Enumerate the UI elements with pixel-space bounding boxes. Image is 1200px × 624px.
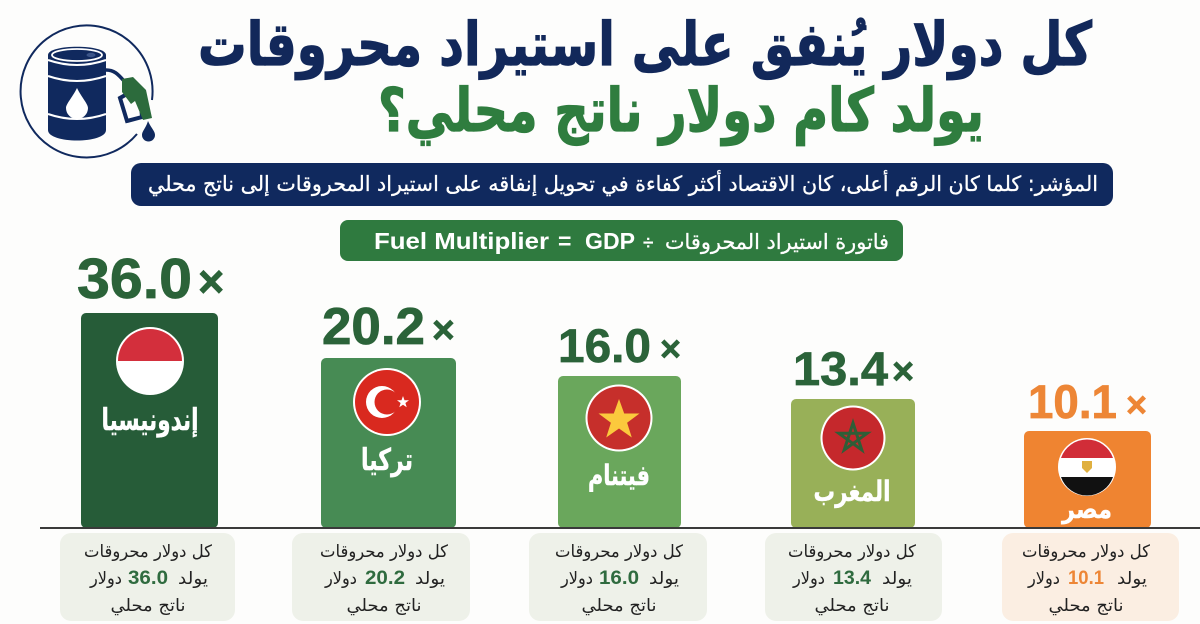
bar: Morocco	[791, 342, 915, 528]
flag: Indonesia	[116, 327, 184, 395]
caption: Vietnam: 16.0	[599, 568, 639, 589]
value: 10.1: 10.1	[1028, 375, 1117, 428]
bar: Turkey	[321, 298, 456, 528]
formula banner: فاتورة استيراد المحروقات	[665, 230, 889, 254]
caption: Turkey	[292, 533, 470, 621]
caption: Morocco: ناتج محلي	[814, 596, 890, 616]
label: Vietnam: فيتنام	[588, 459, 650, 492]
label: Turkey: تركيا	[361, 443, 413, 478]
label: Indonesia: إندونيسيا	[102, 403, 198, 438]
caption: Vietnam: يولد	[649, 569, 679, 589]
value: 10.1: ×	[1126, 384, 1147, 425]
caption: Indonesia: 36.0	[128, 568, 168, 589]
value: 20.2: 20.2	[322, 298, 425, 356]
caption: Vietnam: كل دولار محروقات	[555, 542, 684, 562]
caption: Egypt: كل دولار محروقات	[1022, 542, 1151, 562]
caption: Turkey: يولد	[415, 569, 445, 589]
value: 16.0: ×	[660, 328, 681, 369]
caption: Morocco: 13.4	[833, 568, 871, 589]
bar: Indonesia	[77, 247, 224, 528]
value: 36.0: 36.0	[77, 247, 192, 311]
caption: Morocco: دولار	[792, 569, 825, 589]
value: 36.0: ×	[198, 256, 224, 307]
flag: Egypt	[1058, 438, 1116, 496]
caption: Egypt: 10.1	[1068, 568, 1104, 589]
caption: Egypt: ناتج محلي	[1048, 596, 1124, 616]
caption: Vietnam: ناتج محلي	[582, 596, 656, 616]
flag: Vietnam	[586, 384, 652, 452]
subtitle banner	[131, 163, 1113, 206]
flag: Morocco	[820, 406, 886, 470]
flag: Turkey	[353, 368, 421, 436]
formula banner	[340, 220, 903, 261]
label: Morocco: المغرب	[814, 475, 890, 508]
caption: Indonesia: يولد	[178, 569, 208, 589]
value: 13.4: ×	[892, 351, 914, 393]
value: 16.0: 16.0	[558, 319, 651, 372]
formula banner: =	[558, 228, 571, 254]
baseline axis	[40, 527, 1200, 529]
label: Egypt: مصر	[1060, 495, 1112, 525]
caption: Turkey: ناتج محلي	[346, 596, 422, 616]
caption: Morocco: كل دولار محروقات	[788, 542, 917, 562]
caption: Egypt	[1002, 533, 1179, 621]
caption: Vietnam	[529, 533, 707, 621]
caption: Indonesia: دولار	[89, 569, 122, 589]
caption: Morocco	[765, 533, 942, 621]
title	[198, 10, 1092, 146]
value: 13.4: 13.4	[793, 342, 888, 395]
formula banner: ÷	[643, 233, 653, 254]
caption: Turkey: دولار	[324, 569, 357, 589]
caption: Egypt: دولار	[1027, 569, 1060, 589]
formula banner: Fuel Multiplier	[374, 228, 549, 254]
caption: Turkey: 20.2	[365, 568, 405, 589]
bar: Egypt	[1024, 375, 1151, 528]
subtitle banner: المؤشر: كلما كان الرقم أعلى، كان الاقتصاد أكثر كفاءة في تحويل إنفاقه على استيراد المحروقات إلى ناتج محلي	[148, 170, 1098, 197]
title: يولد كام دولار ناتج محلي؟	[378, 76, 984, 146]
caption: Morocco: يولد	[882, 569, 912, 589]
bar: Vietnam	[558, 319, 681, 528]
caption: Turkey: كل دولار محروقات	[320, 542, 449, 562]
caption: Indonesia	[60, 533, 235, 621]
caption: Egypt: يولد	[1117, 569, 1147, 589]
caption: Vietnam: دولار	[560, 569, 593, 589]
value: 20.2: ×	[432, 309, 455, 352]
formula banner: GDP	[585, 228, 635, 254]
icon: fuel barrel with nozzle	[21, 25, 155, 157]
caption: Indonesia: ناتج محلي	[110, 596, 186, 616]
caption: Indonesia: كل دولار محروقات	[84, 542, 213, 562]
